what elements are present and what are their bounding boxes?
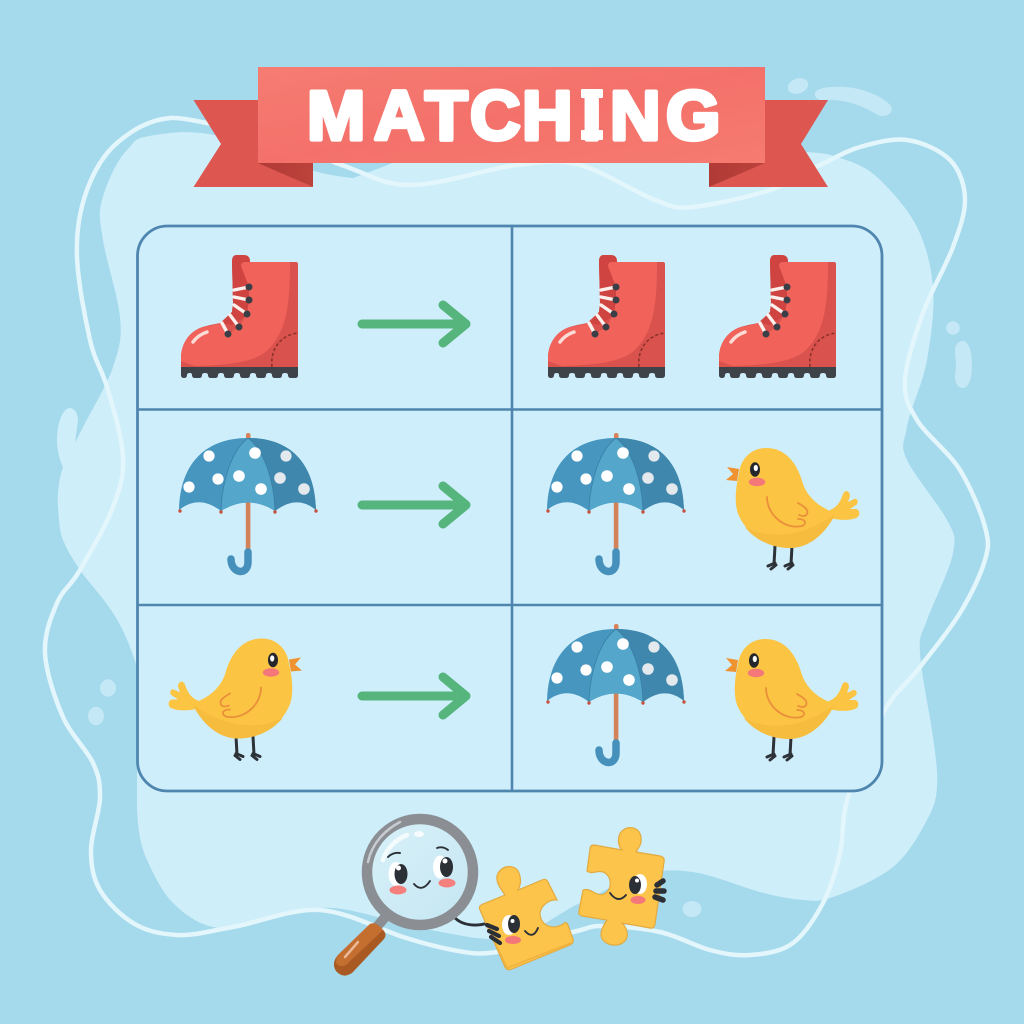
row 2 left: umbrella xyxy=(178,433,318,571)
magnifier arm xyxy=(455,918,488,925)
table background and frame xyxy=(138,226,882,791)
left ribbon fold xyxy=(258,163,313,187)
row 3 arrow xyxy=(362,677,466,715)
row 1 right: boot xyxy=(548,255,665,378)
decorative bubbles xyxy=(88,75,972,917)
title: MATCHING xyxy=(307,76,720,154)
row 2 right: bird xyxy=(726,448,859,569)
puzzle piece right xyxy=(579,828,664,945)
left ribbon tail xyxy=(194,100,313,187)
row 3 right: bird xyxy=(725,639,858,760)
magnifier face xyxy=(388,847,456,894)
right ribbon fold xyxy=(709,163,765,187)
row 3 right: umbrella xyxy=(546,624,686,762)
magnifier lens and ring xyxy=(367,819,473,925)
right ribbon tail xyxy=(709,100,828,187)
magnifying glass character xyxy=(334,819,488,976)
row 2 right: umbrella xyxy=(546,433,686,571)
row 2 arrow xyxy=(362,486,466,524)
puzzle piece left xyxy=(479,867,573,970)
matching table xyxy=(138,226,882,791)
row 1 left: boot xyxy=(181,255,298,378)
row 1 arrow xyxy=(362,305,466,343)
wavy white outline xyxy=(45,118,988,955)
row 1 right: second boot xyxy=(719,255,836,378)
row 3 left: bird xyxy=(169,638,302,760)
background blob xyxy=(57,132,955,939)
letter I slab serifs xyxy=(582,90,602,139)
magnifier handle xyxy=(334,916,386,976)
ribbon banner with title xyxy=(194,67,828,187)
banner body xyxy=(258,67,765,163)
